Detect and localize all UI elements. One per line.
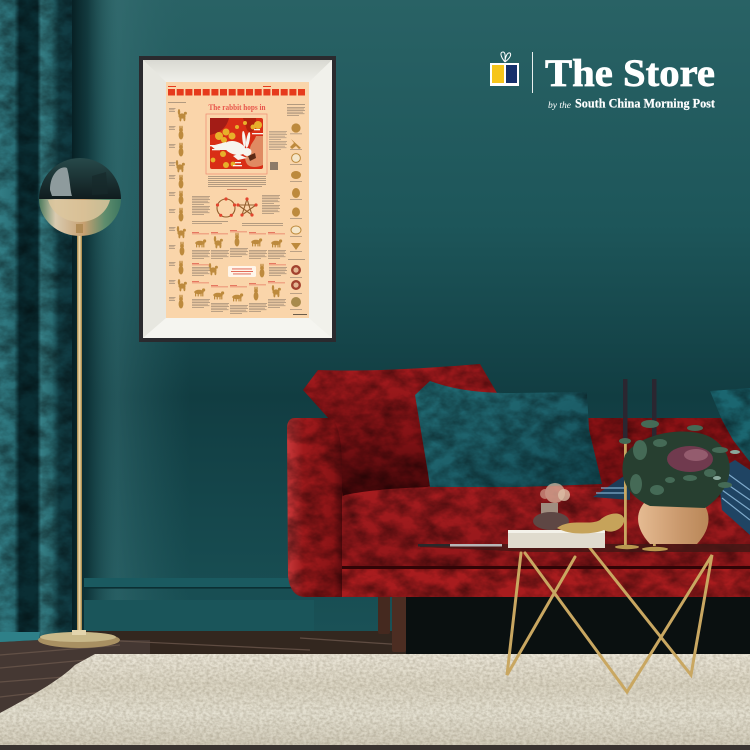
- logo wordmark: The Store: [545, 52, 715, 95]
- rabbit: [210, 129, 263, 166]
- frame: [139, 56, 336, 342]
- centre callout: [228, 266, 256, 277]
- lamp globe: [39, 158, 121, 236]
- table decor: [508, 379, 740, 551]
- gold ornament: [557, 514, 624, 534]
- logo byline: by the: [548, 101, 571, 111]
- wreath and star section: [192, 195, 283, 226]
- seat cushion: [334, 486, 750, 568]
- rabbit illustration: [206, 114, 267, 174]
- five-element cycle: [217, 199, 256, 217]
- right column: intro text and charms: [287, 104, 305, 310]
- sofa shadow: [406, 597, 750, 654]
- table legs: [507, 548, 712, 692]
- sofa arm: [287, 418, 342, 597]
- candles: [615, 379, 668, 551]
- floor lamp: [38, 158, 121, 648]
- poster title: The rabbit hops in: [208, 103, 266, 112]
- left column: rabbit figures and labels: [168, 102, 187, 308]
- logo byline: South China Morning Post: [575, 96, 716, 110]
- sofa legs: [378, 596, 406, 652]
- floor: [0, 631, 750, 750]
- poster sheet: [166, 82, 309, 318]
- hydrangea: [667, 446, 713, 472]
- right teal pillow: [710, 388, 750, 462]
- striped throw: [593, 460, 750, 535]
- vase: [638, 503, 709, 544]
- lamp base: [38, 630, 120, 648]
- book: [508, 530, 605, 548]
- table glass: [418, 544, 750, 552]
- mat: [143, 60, 332, 338]
- framed poster: [139, 56, 336, 342]
- sofa: [287, 364, 750, 654]
- The Store logo: [490, 52, 716, 111]
- lamp pole: [77, 232, 82, 632]
- dried flowers: [540, 483, 570, 503]
- teal pillow: [415, 381, 602, 487]
- illustration side note and QR: [269, 131, 287, 170]
- coffee table: [418, 544, 750, 692]
- zodiac animal grid: [192, 230, 287, 314]
- sofa back: [340, 418, 750, 500]
- rug: [0, 654, 750, 745]
- poster credit: [293, 314, 307, 315]
- zodiac chips row: [168, 86, 305, 96]
- curtain: [0, 0, 72, 642]
- red pillow: [303, 364, 497, 497]
- gift box icon: [490, 52, 519, 86]
- sofa base: [330, 569, 750, 597]
- plant: [619, 420, 740, 508]
- small vase: [533, 503, 569, 530]
- intro paragraph: [208, 176, 266, 190]
